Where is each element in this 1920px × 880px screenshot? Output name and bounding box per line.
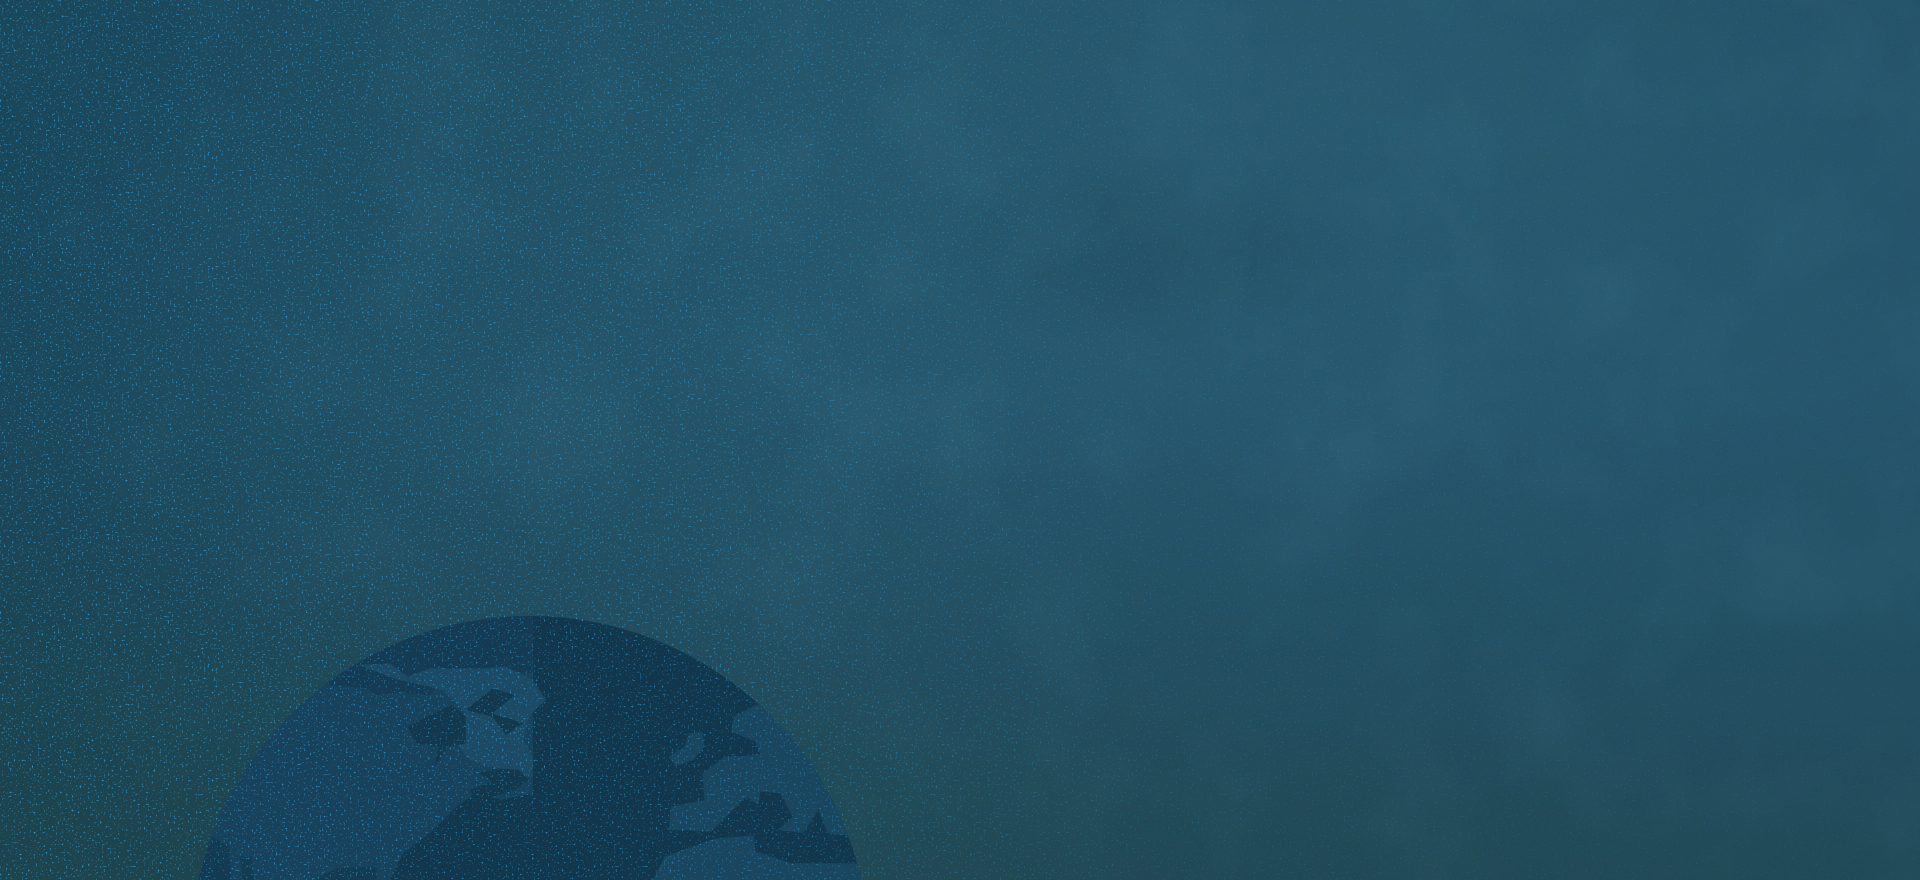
mediterranean and red sea — [754, 792, 859, 863]
globe — [198, 616, 862, 880]
baffin sea — [466, 688, 524, 735]
globe: lit western hemisphere — [212, 617, 533, 880]
atlantic ocean — [390, 793, 533, 880]
pacific patch — [314, 867, 376, 880]
far-west landmass shadow — [199, 836, 231, 880]
globe: shaded eastern hemisphere — [533, 616, 760, 880]
globe: continents and oceans — [199, 616, 862, 880]
british isles — [669, 732, 705, 767]
eurasia and africa lit land — [654, 705, 862, 880]
polar sea — [326, 616, 532, 695]
hudson bay — [408, 705, 466, 767]
greenland and arctic land — [360, 664, 546, 712]
gulf and caribbean — [470, 768, 528, 797]
